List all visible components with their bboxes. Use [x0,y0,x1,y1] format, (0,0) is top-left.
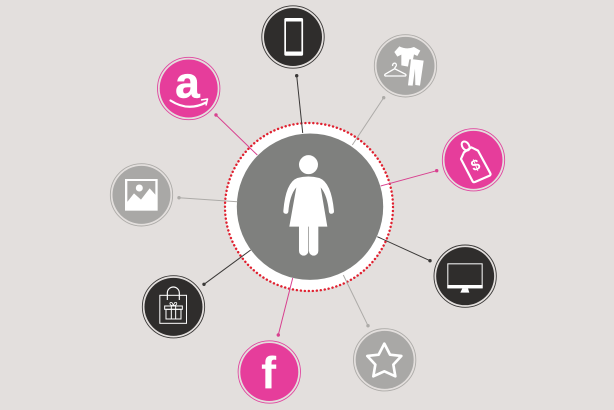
icon: facebook [238,341,300,403]
connector: facebook [277,278,293,337]
icon: star [353,329,416,391]
connector: image [177,196,237,202]
connector: amazon [214,113,257,155]
icon: phone [262,6,324,68]
connector: star [343,275,370,327]
central hub [225,123,393,291]
connector: monitor [377,237,432,262]
connector: price tag [381,169,438,186]
icon: woman figure [283,155,334,256]
icon: price tag: $ [469,156,483,175]
icon: monitor [434,245,496,307]
icon: gift bag [142,276,205,338]
icon: image [110,164,173,226]
connector: clothes [352,96,385,145]
icon: amazon: a [175,58,200,108]
icon: amazon [158,57,220,120]
icon: facebook: f [261,348,277,398]
connector: phone [295,74,303,133]
connector: gift bag [202,250,251,286]
icon: clothes [374,35,437,97]
icon: price tag [442,129,505,191]
